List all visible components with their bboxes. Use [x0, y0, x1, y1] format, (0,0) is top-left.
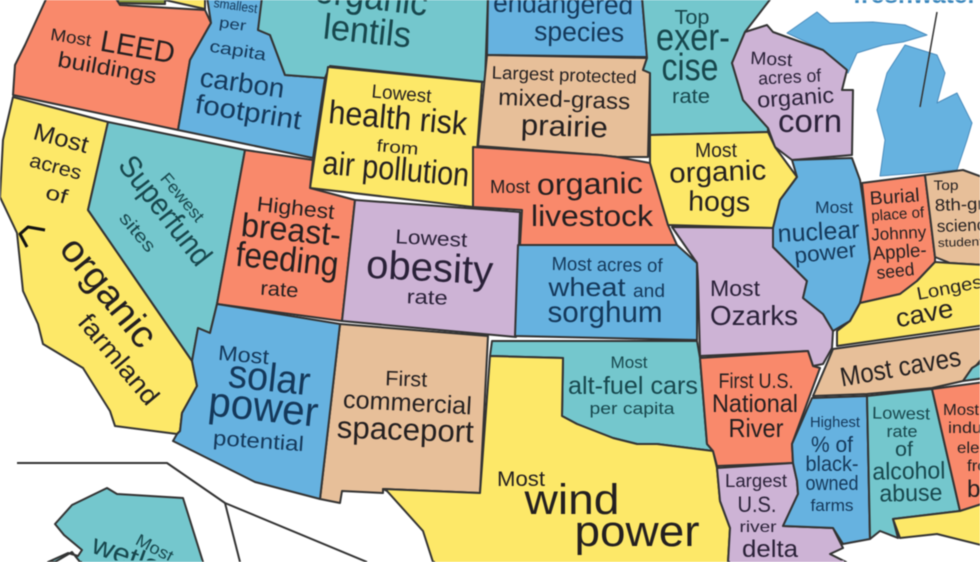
text: Most acres of organic corn — [750, 48, 842, 139]
text: Fewest Superfund sites: Fewest — [156, 169, 208, 226]
text: smallest per capita carbon footprint: carbon — [198, 62, 286, 104]
text: Top 8th-grade science students — [934, 177, 980, 250]
text: Largest U.S. river delta: U.S. — [738, 492, 776, 517]
text: First commercial spaceport: First — [385, 367, 428, 392]
bottom edge cover strips — [82, 560, 844, 562]
text: Most solar power potential — [206, 342, 321, 456]
state: Alaska — [48, 488, 211, 562]
state: Florida — [893, 503, 980, 546]
text: Most nuclear power: nuclear — [777, 216, 860, 248]
text: Most acres of organic farmland: Most — [30, 118, 92, 159]
text: Highest percent of black-owned farms: Highest — [810, 414, 861, 431]
state: North Dakota — [487, 0, 647, 57]
text: Lowest health risk from air pollution — [321, 81, 471, 193]
state: Mississippi — [783, 396, 870, 544]
text: Most wind power: wind — [523, 476, 620, 524]
text: Lowest obesity rate: obesity — [365, 243, 494, 293]
text: Most wind power: power — [574, 507, 700, 556]
text: Most acres of wheat and sorghum — [547, 254, 665, 329]
text: Most LEED buildings — [49, 25, 177, 89]
text: Largest protected mixed-grass prairie: Largest protected — [491, 62, 637, 88]
divider line between insets — [225, 503, 240, 562]
text: Top exercise rate — [656, 7, 730, 108]
text: Highest percent of black-owned farms: black- — [806, 453, 858, 476]
text: Burial place of Johnny Appleseed: place of — [871, 204, 926, 225]
state: Arkansas — [700, 351, 820, 466]
text: Lowest obesity rate: rate — [406, 286, 448, 310]
state: Alabama — [867, 389, 960, 539]
text: Most organic livestock: organic — [537, 167, 643, 202]
text: Largest U.S. river delta: river — [740, 519, 777, 536]
text: Most solar power potential: power — [206, 377, 321, 436]
text: Most nuclear power: Most — [815, 198, 853, 217]
text: Top exercise rate: Top — [674, 7, 710, 29]
text: Largest protected mixed-grass prairie: prairie — [520, 109, 608, 145]
text: Most Ozarks: Ozarks — [710, 300, 798, 331]
text: Most nuclear power: power — [793, 237, 857, 268]
state: Kentucky — [837, 262, 980, 346]
text: Most industrial electricity from biomass — [943, 402, 980, 503]
text: Lowest obesity rate: Lowest — [395, 226, 468, 252]
state: Arizona — [173, 304, 340, 499]
text: Most acres of wheat and sorghum: Most acres of — [551, 254, 663, 277]
text: Most LEED buildings: Most — [49, 25, 93, 50]
text: Longest cave — [893, 271, 980, 333]
text: organic lentils: lentils — [321, 6, 413, 56]
text: Most caves: Most caves — [838, 342, 963, 393]
text: Lowest rate of alcohol abuse: alcohol — [872, 457, 946, 486]
text: Most acres of organic corn: corn — [778, 103, 842, 139]
text: Highest percent of black-owned farms: farms — [810, 496, 854, 515]
text: Most LEED buildings: buildings — [56, 47, 159, 89]
text: Lowest rate of alcohol abuse: abuse — [879, 479, 943, 508]
text: Lowest health risk from air pollution: air pollution — [321, 144, 471, 193]
Washington sliver — [118, 0, 205, 9]
state: Tennessee — [813, 328, 980, 396]
text: Most acres of organic farmland: of — [43, 182, 71, 209]
state: Idaho — [178, 0, 325, 158]
text: Longest cave: cave — [893, 293, 956, 333]
text: Highest percent of black-owned farms: owned — [806, 473, 858, 495]
text: Largest U.S. river delta — [725, 471, 799, 562]
text: First U.S. National River — [712, 370, 798, 443]
state: Illinois — [773, 158, 870, 331]
text: Top exercise rate: exer- — [656, 17, 730, 59]
text: Lowest rate of alcohol abuse: Lowest — [872, 403, 931, 424]
text: endangered species: species — [534, 16, 624, 48]
text: Top 8th-grade science students: Top — [934, 177, 959, 193]
text: smallest per capita carbon footprint: capita — [208, 37, 268, 65]
text: Most acres of organic farmland — [27, 118, 166, 411]
text: Top exercise rate: rate — [672, 86, 710, 108]
text: Most acres of organic corn: acres of — [758, 65, 823, 89]
text: Most nuclear power — [777, 198, 860, 268]
text: Most acres of organic farmland: farmland — [72, 307, 166, 411]
text: First commercial spaceport: commercial — [342, 386, 473, 420]
state: California — [0, 97, 197, 434]
text: Lowest obesity rate — [365, 226, 494, 310]
text: Most acres of wheat and sorghum: sorghum — [548, 296, 662, 329]
text: Lowest health risk from air pollution: Lowest — [371, 81, 433, 108]
text: First U.S. National River: National — [712, 390, 798, 418]
state: Oregon — [13, 0, 211, 130]
text: Burial place of Johnny Appleseed: Burial — [869, 185, 920, 210]
text: Burial place of Johnny Appleseed — [869, 185, 927, 283]
text: Burial place of Johnny Appleseed: Apple- — [872, 240, 927, 265]
text: Most organic hogs: Most — [695, 140, 737, 162]
text: Most alt-fuel cars per capita — [568, 353, 698, 418]
text: Highest breast-feeding rate: breast- — [240, 206, 343, 253]
text: Most organic hogs — [669, 140, 767, 218]
state: Michigan lower peninsula — [877, 45, 972, 176]
text: Most solar power potential: potential — [212, 427, 305, 456]
text: Most Ozarks — [710, 276, 798, 331]
state: Ohio — [925, 170, 980, 265]
text: Most acres of organic farmland: organic — [51, 229, 166, 356]
text: First commercial spaceport: spaceport — [336, 410, 475, 449]
text: Most organic livestock: Most — [490, 177, 530, 197]
text: Most acres of wheat and sorghum: wheat — [547, 272, 626, 302]
state: Nevada — [88, 122, 245, 361]
text: Lowest rate of alcohol abuse: rate — [886, 422, 918, 441]
text: smallest per capita carbon footprint: per — [218, 14, 247, 35]
text: Highest breast-feeding rate — [234, 193, 343, 302]
text: Lowest health risk from air pollution: from — [376, 136, 419, 159]
text: Lowest health risk from air pollution: health risk — [327, 93, 469, 142]
state: Louisiana — [717, 463, 846, 562]
text: Top exercise rate: cise — [662, 47, 718, 89]
state: Michigan upper peninsula — [787, 12, 927, 73]
text: Largest U.S. river delta: Largest — [725, 471, 787, 491]
text: First commercial spaceport — [336, 367, 475, 449]
callout: freshwater label and leader line — [853, 0, 977, 107]
text: smallest per capita carbon footprint — [193, 0, 304, 135]
text: First U.S. National River: First U.S. — [718, 370, 794, 393]
text: Most acres of wheat and sorghum: and — [633, 281, 665, 301]
text: Largest protected mixed-grass prairie — [491, 62, 637, 145]
state: Montana — [258, 0, 488, 82]
text: Most acres of organic farmland: acres — [27, 150, 84, 185]
text: Highest percent of black-owned farms: % of — [811, 432, 854, 457]
state: New Mexico — [320, 324, 488, 503]
state: Indiana — [860, 175, 935, 303]
text: Most organic livestock: livestock — [531, 200, 654, 233]
text: Highest percent of black-owned farms — [806, 414, 861, 515]
state: Missouri — [672, 227, 833, 366]
state: Kansas — [515, 245, 697, 340]
text: Most solar power potential: Most — [217, 342, 270, 369]
state: Utah — [217, 150, 355, 321]
text: Most acres of organic corn: organic — [756, 82, 835, 113]
text: First U.S. National River: River — [728, 413, 784, 443]
text: Highest breast-feeding rate: rate — [260, 278, 299, 302]
text: Most alt-fuel cars per capita: per capita — [590, 399, 675, 418]
text: Most Ozarks: Most — [710, 276, 760, 301]
text: Highest breast-feeding rate: Highest — [256, 193, 336, 224]
text: Most organic hogs: hogs — [688, 185, 750, 218]
icon: California bay mark — [20, 227, 45, 247]
text: Longest cave: Longest — [915, 271, 980, 304]
state: Georgia — [932, 382, 980, 511]
state: Iowa — [650, 132, 797, 228]
text: Most acres of organic corn: Most — [750, 48, 793, 70]
text: Most solar power potential: solar — [226, 352, 312, 404]
state: Nebraska — [473, 147, 677, 245]
state: North Carolina sliver — [963, 360, 980, 381]
text: Most alt-fuel cars per capita: Most — [610, 353, 648, 372]
text: smallest per capita carbon footprint: footprint — [193, 89, 304, 135]
text: Largest protected mixed-grass prairie: mixed-grass — [498, 84, 631, 114]
text: Most industrial electricity from biomass: Most — [943, 402, 980, 419]
text: Most LEED buildings: LEED — [98, 25, 177, 70]
text: Most alt-fuel cars per capita: alt-fuel cars — [568, 372, 698, 400]
text: Highest breast-feeding rate: feeding — [234, 235, 340, 284]
divider lines around Alaska inset — [17, 463, 367, 562]
text: Lowest rate of alcohol abuse — [872, 403, 946, 508]
state: Wisconsin — [732, 25, 853, 160]
state: Oklahoma — [490, 341, 713, 451]
text: Burial place of Johnny Appleseed: Johnny — [871, 223, 927, 244]
state: Wyoming — [310, 67, 482, 207]
state: Minnesota — [642, 0, 772, 135]
state: Texas — [383, 356, 730, 562]
text: Most wind power: Most — [497, 468, 545, 491]
text: Fewest Superfund sites: sites — [115, 208, 160, 256]
text: Most organic hogs: organic — [669, 154, 767, 189]
text: Most wind power — [497, 468, 700, 556]
text: endangered species — [493, 0, 633, 48]
text: Most organic livestock — [490, 167, 654, 233]
text: Lowest rate of alcohol abuse: of — [895, 439, 913, 461]
text: Fewest Superfund sites: Superfund — [111, 149, 219, 273]
state: South Dakota — [478, 55, 650, 157]
state: Colorado — [342, 200, 520, 337]
text: Burial place of Johnny Appleseed: seed — [875, 259, 915, 283]
